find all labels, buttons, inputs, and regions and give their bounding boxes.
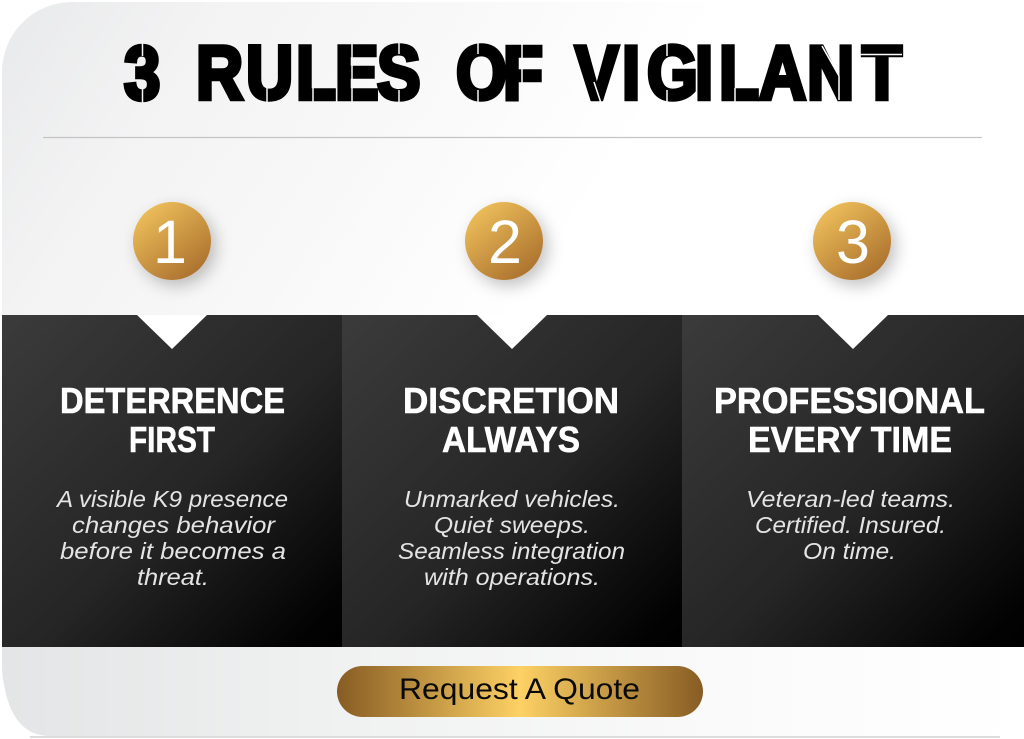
text: discretion description: Unmarked vehicles. xyxy=(404,486,620,512)
text: deterrence description: A visible K9 presence xyxy=(55,486,288,512)
heading: discretion always: DISCRETION xyxy=(403,380,619,421)
text: discretion description xyxy=(398,486,625,590)
number badge 2: 2 xyxy=(488,208,522,276)
heading: discretion always: ALWAYS xyxy=(442,419,580,460)
text: deterrence description xyxy=(55,486,288,590)
button: request a quote: Request A Quote xyxy=(399,673,640,706)
number badge 2 xyxy=(465,202,543,280)
panel: deterrence first xyxy=(2,315,342,647)
text: deterrence description: threat. xyxy=(137,564,209,590)
number badge 1 xyxy=(133,202,211,280)
text: professional description: Veteran-led teams. xyxy=(746,486,955,512)
text: discretion description: Quiet sweeps. xyxy=(434,512,590,538)
heading: deterrence first xyxy=(60,380,285,460)
panel: professional every time xyxy=(682,315,1024,647)
text: deterrence description: before it becomes a xyxy=(60,538,286,564)
number badge 3: 3 xyxy=(836,208,870,276)
number badge 1: 1 xyxy=(153,208,187,276)
number badge 3 xyxy=(813,202,891,280)
text: professional description xyxy=(746,486,955,564)
heading: deterrence first: DETERRENCE xyxy=(60,380,285,421)
heading: professional every time xyxy=(714,380,985,460)
text: professional description: Certified. Insured. xyxy=(755,512,946,538)
text: deterrence description: changes behavior xyxy=(72,512,276,538)
title: 3 RULES OF VIGILANT xyxy=(124,31,902,116)
heading: deterrence first: FIRST xyxy=(129,419,215,460)
heading: discretion always xyxy=(403,380,619,460)
heading: professional every time: EVERY TIME xyxy=(748,419,952,460)
panel: discretion always xyxy=(342,315,682,647)
text: discretion description: Seamless integration xyxy=(398,538,625,564)
button: request a quote xyxy=(337,666,703,717)
text: professional description: On time. xyxy=(803,538,896,564)
heading: professional every time: PROFESSIONAL xyxy=(714,380,985,421)
text: discretion description: with operations. xyxy=(424,564,600,590)
